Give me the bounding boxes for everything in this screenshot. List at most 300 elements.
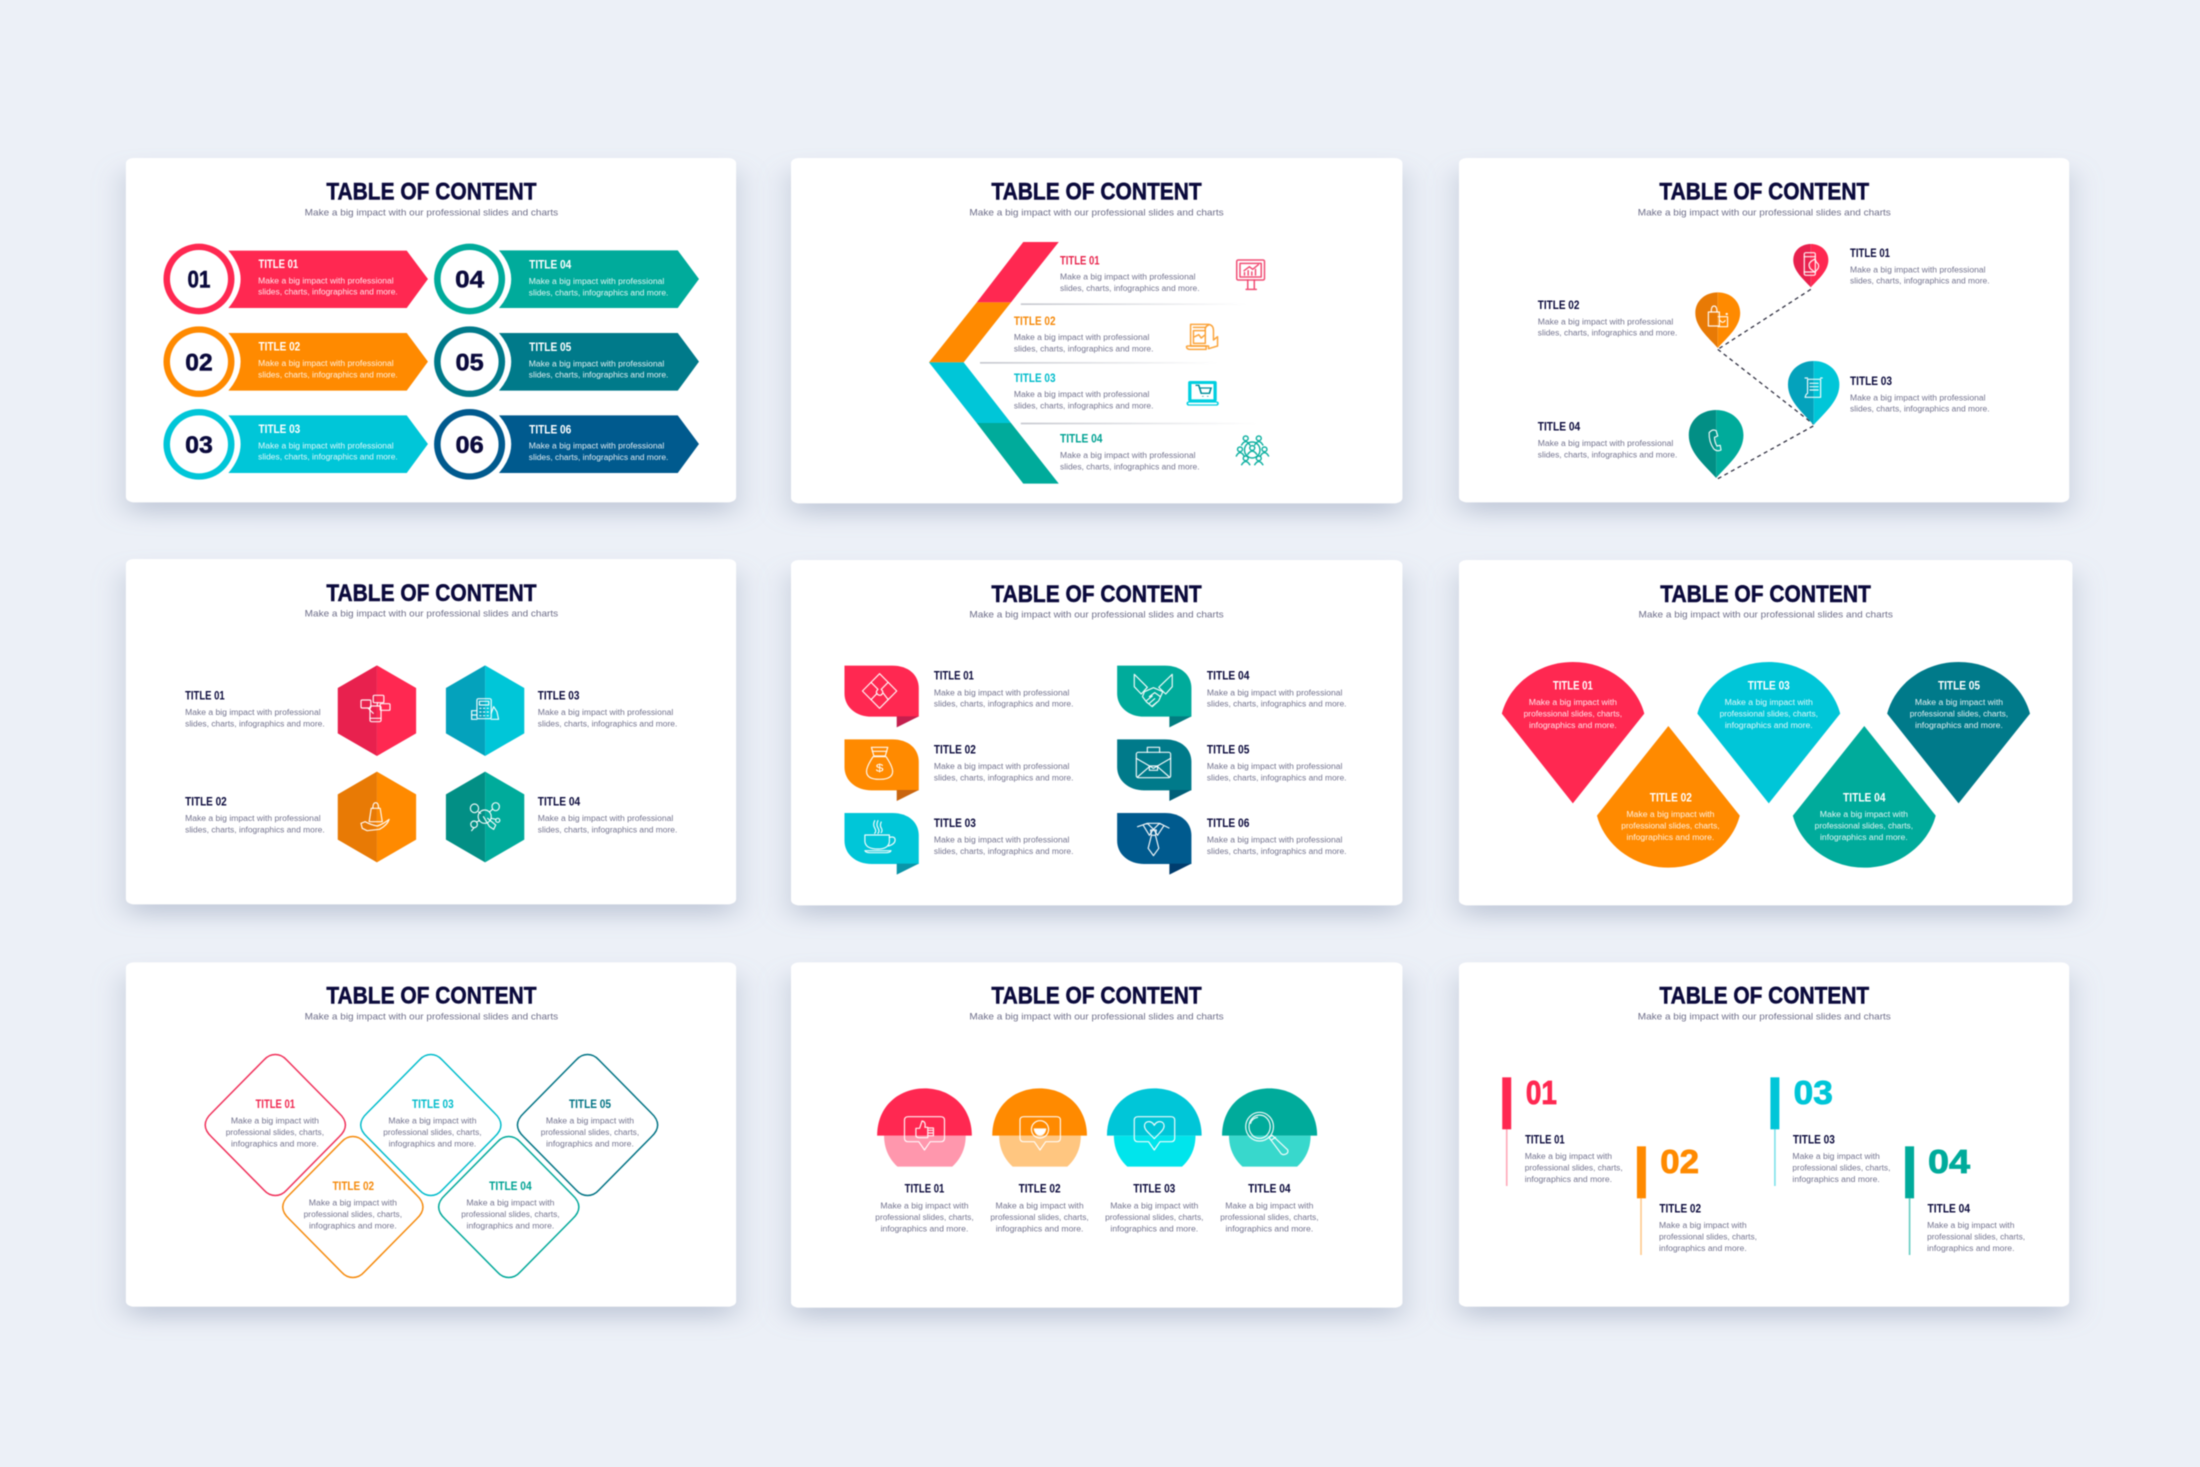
description 04	[538, 814, 677, 834]
item 02	[163, 326, 428, 397]
description 01: Make a big impact with professional	[1850, 265, 1986, 274]
description 04: infographics and more.	[467, 1222, 554, 1230]
description 02: Make a big impact with professional	[185, 814, 321, 823]
description 01: Make a big impact with	[231, 1117, 319, 1125]
description 01	[934, 688, 1073, 708]
item 05	[1887, 662, 2030, 803]
number ring 06	[434, 409, 505, 480]
tab 01	[844, 666, 919, 727]
description 01	[185, 708, 325, 728]
label 01: TITLE 01	[256, 1097, 295, 1111]
description 03	[1792, 1152, 1890, 1184]
label 01: TITLE 01	[185, 689, 225, 702]
item 01	[1502, 1074, 1623, 1186]
description 04: slides, charts, infographics and more.	[1538, 451, 1677, 459]
description 02	[1014, 333, 1153, 353]
description 01: slides, charts, infographics and more.	[934, 700, 1073, 708]
label 02: TITLE 02	[1019, 1182, 1061, 1195]
description 01	[1524, 698, 1622, 730]
label 04: TITLE 04	[1538, 420, 1581, 433]
description 05: Make a big impact with	[1915, 698, 2003, 707]
label 02: TITLE 02	[185, 795, 227, 808]
icon: phone with chat bubbles	[361, 695, 390, 722]
diamond 02	[283, 1136, 423, 1277]
arrow 01	[228, 251, 428, 308]
description 02: infographics and more.	[1627, 833, 1714, 842]
subheading: Make a big impact with our professional slides and charts	[305, 609, 558, 619]
description 04: Make a big impact with professional	[1060, 451, 1196, 460]
chevron	[929, 242, 1059, 484]
label 04: TITLE 04	[489, 1179, 532, 1193]
item 04	[1117, 666, 1347, 727]
icon: telephone receiver	[1709, 430, 1721, 451]
item 01	[1793, 244, 1990, 287]
description 04: infographics and more.	[1927, 1244, 2014, 1253]
description 03: Make a big impact with	[1792, 1152, 1880, 1161]
description 02	[990, 1202, 1089, 1233]
description 01: Make a big impact with professional	[258, 276, 394, 285]
card	[126, 559, 736, 904]
description 01	[258, 276, 398, 296]
label 02: TITLE 02	[934, 743, 976, 756]
description 03: slides, charts, infographics and more.	[1014, 401, 1153, 410]
tab 06	[1117, 813, 1191, 875]
item 04	[1060, 432, 1269, 471]
description 03: professional slides, charts,	[1720, 710, 1818, 718]
label 04: TITLE 04	[1843, 791, 1886, 804]
item 06	[434, 409, 699, 480]
description 04	[461, 1199, 560, 1230]
description 06	[529, 442, 668, 462]
description 03: professional slides, charts,	[1792, 1163, 1890, 1172]
description 01: Make a big impact with professional	[185, 708, 321, 717]
item 03	[1788, 361, 1990, 425]
description 02: slides, charts, infographics and more.	[258, 370, 398, 379]
label 04: TITLE 04	[1060, 432, 1103, 445]
label 01: TITLE 01	[934, 669, 974, 682]
label 03: TITLE 03	[934, 816, 976, 830]
description 04: infographics and more.	[1226, 1225, 1313, 1233]
hexagon 04	[446, 772, 524, 862]
item 04	[446, 772, 677, 862]
diamond 04	[439, 1136, 579, 1277]
description 01	[226, 1117, 324, 1148]
description 02: slides, charts, infographics and more.	[1538, 329, 1677, 337]
number 04: 04	[1928, 1143, 1970, 1180]
arrow 03	[228, 415, 428, 473]
pin 04	[1689, 410, 1743, 478]
description 03: Make a big impact with	[388, 1117, 477, 1125]
number 05: 05	[456, 349, 484, 376]
description 05	[541, 1117, 639, 1148]
item 03	[163, 409, 428, 480]
subheading: Make a big impact with our professional slides and charts	[969, 1012, 1224, 1022]
description 04: slides, charts, infographics and more.	[529, 288, 668, 297]
description 04: slides, charts, infographics and more.	[1060, 462, 1200, 471]
icon: phone and hand	[1804, 253, 1819, 275]
description 01: Make a big impact with	[880, 1202, 969, 1210]
description 03: infographics and more.	[389, 1140, 476, 1148]
description 01: Make a big impact with professional	[1060, 273, 1196, 281]
arrow 05	[499, 333, 699, 391]
description 03: slides, charts, infographics and more.	[258, 453, 398, 461]
item 03	[446, 665, 677, 756]
description 03: slides, charts, infographics and more.	[1850, 405, 1990, 413]
arrow 02	[228, 333, 428, 391]
item 05	[517, 1054, 658, 1195]
card	[126, 158, 736, 502]
description 03: slides, charts, infographics and more.	[538, 719, 677, 728]
description 04	[1538, 439, 1677, 459]
diamond 01	[205, 1054, 345, 1195]
label 01: TITLE 01	[1525, 1133, 1565, 1146]
item 04	[434, 244, 699, 314]
drop 01	[1502, 662, 1644, 803]
heading: TABLE OF CONTENT	[991, 178, 1202, 205]
description 01: slides, charts, infographics and more.	[1850, 277, 1990, 285]
item 03	[1697, 662, 1840, 803]
item 01	[875, 1088, 974, 1233]
panel: chevron list	[791, 158, 1402, 503]
description 02: slides, charts, infographics and more.	[185, 825, 325, 834]
dome 01	[877, 1088, 972, 1167]
description 05	[529, 359, 668, 379]
description 01: Make a big impact with	[1525, 1152, 1612, 1161]
description 01: infographics and more.	[1525, 1175, 1612, 1184]
item 05	[434, 326, 699, 397]
icon: shirt collar and tie	[1138, 823, 1169, 856]
description 02	[934, 762, 1073, 782]
label 02: TITLE 02	[332, 1179, 374, 1193]
description 02: infographics and more.	[309, 1222, 397, 1230]
item 02	[1538, 292, 1740, 348]
description 05: Make a big impact with	[546, 1117, 634, 1125]
label 02: TITLE 02	[1014, 314, 1056, 328]
item 02	[1014, 314, 1218, 353]
card	[1459, 962, 2069, 1307]
item 02	[844, 739, 1073, 801]
bar 03	[1770, 1077, 1779, 1186]
arrow 04	[499, 250, 699, 308]
label 01: TITLE 01	[1850, 246, 1890, 260]
description 03: professional slides, charts,	[383, 1128, 482, 1137]
description 03: Make a big impact with	[1110, 1202, 1198, 1210]
description 04: infographics and more.	[1820, 833, 1908, 842]
card	[1459, 560, 2072, 905]
heading: TABLE OF CONTENT	[991, 982, 1202, 1009]
description 01	[875, 1202, 974, 1233]
label 03: TITLE 03	[1133, 1182, 1175, 1195]
label 04: TITLE 04	[538, 795, 581, 808]
icon: smiley in bubble	[1020, 1117, 1060, 1150]
bar 04	[1905, 1146, 1914, 1255]
description 01	[1060, 273, 1200, 293]
panel: domes	[791, 962, 1402, 1308]
item 03	[844, 813, 1073, 875]
label 03: TITLE 03	[1014, 371, 1056, 385]
item 05	[1117, 739, 1347, 801]
label 01: TITLE 01	[1060, 254, 1100, 267]
description 03: Make a big impact with professional	[934, 836, 1069, 844]
label 02: TITLE 02	[1650, 791, 1692, 804]
subheading: Make a big impact with our professional slides and charts	[305, 1012, 558, 1022]
description 01: Make a big impact with	[1529, 698, 1617, 707]
heading: TABLE OF CONTENT	[326, 178, 537, 205]
icon: heart in bubble	[1134, 1117, 1175, 1150]
label 02: TITLE 02	[1659, 1202, 1701, 1215]
description 03	[934, 836, 1073, 856]
label 04: TITLE 04	[529, 258, 572, 271]
description 03	[1850, 393, 1990, 413]
description 02: Make a big impact with professional	[1538, 317, 1673, 326]
heading: TABLE OF CONTENT	[326, 580, 537, 606]
description 05: professional slides, charts,	[541, 1128, 639, 1137]
label 02: TITLE 02	[259, 340, 300, 353]
item 04	[439, 1136, 579, 1277]
description 02: professional slides, charts,	[1659, 1232, 1757, 1241]
icon: money bag	[867, 747, 893, 779]
icon: shopping bags	[1708, 306, 1728, 327]
description 03: Make a big impact with professional	[1014, 390, 1149, 399]
subheading: Make a big impact with our professional slides and charts	[1639, 610, 1893, 620]
description 04: professional slides, charts,	[1815, 821, 1913, 830]
tab 03	[844, 813, 919, 875]
description 04: professional slides, charts,	[1927, 1232, 2025, 1241]
label 05: TITLE 05	[1938, 679, 1980, 692]
card	[791, 158, 1402, 503]
description 05: professional slides, charts,	[1910, 710, 2008, 718]
description 05: slides, charts, infographics and more.	[1207, 773, 1347, 782]
label 01: TITLE 01	[1553, 679, 1593, 692]
diamond 03	[361, 1054, 501, 1195]
tab 04	[1117, 666, 1191, 727]
description 03	[258, 441, 398, 461]
description 04: Make a big impact with	[466, 1199, 554, 1207]
description 04	[1815, 810, 1913, 842]
description 03: Make a big impact with professional	[1850, 393, 1986, 402]
pin 02	[1695, 292, 1740, 348]
number 03: 03	[1794, 1074, 1833, 1111]
icon: briefcase	[1136, 747, 1171, 778]
description 04: Make a big impact with	[1927, 1221, 2014, 1230]
heading: TABLE OF CONTENT	[1660, 581, 1871, 607]
label 02: TITLE 02	[1538, 298, 1579, 312]
description 04: professional slides, charts,	[1220, 1213, 1319, 1222]
description 02	[1659, 1221, 1757, 1253]
label 01: TITLE 01	[259, 257, 298, 271]
heading: TABLE OF CONTENT	[326, 982, 537, 1009]
number ring 04	[434, 244, 505, 314]
description 03: slides, charts, infographics and more.	[934, 847, 1073, 856]
item 01	[844, 666, 1073, 727]
label 05: TITLE 05	[529, 340, 571, 354]
label 01: TITLE 01	[905, 1182, 944, 1195]
description 06: slides, charts, infographics and more.	[529, 453, 668, 462]
hexagon 01	[338, 665, 416, 756]
label 04: TITLE 04	[1248, 1182, 1291, 1195]
panel: hexagons	[126, 559, 736, 904]
label 04: TITLE 04	[1928, 1202, 1971, 1215]
description 01: professional slides, charts,	[1524, 710, 1622, 718]
description 04	[529, 277, 668, 297]
number 06: 06	[456, 432, 484, 458]
description 02	[1538, 317, 1677, 337]
description 04	[1220, 1202, 1319, 1233]
description 03: infographics and more.	[1792, 1175, 1880, 1184]
description 04: slides, charts, infographics and more.	[538, 825, 677, 834]
description 04: Make a big impact with professional	[529, 277, 664, 286]
item 04	[1538, 410, 1743, 478]
description 02: Make a big impact with	[309, 1199, 397, 1207]
item 01	[185, 665, 416, 756]
description 04: Make a big impact with professional	[1538, 439, 1673, 448]
description 04	[1927, 1221, 2025, 1253]
icon: document and envelope	[1187, 324, 1218, 349]
hexagon 02	[338, 772, 416, 862]
description 05	[1207, 762, 1347, 782]
card	[1459, 158, 2069, 502]
subheading: Make a big impact with our professional slides and charts	[305, 208, 558, 218]
card	[126, 962, 736, 1307]
description 02: professional slides, charts,	[304, 1210, 402, 1219]
drop 05	[1887, 662, 2030, 803]
panel: big numbers with bars	[1459, 962, 2069, 1307]
number ring 01	[163, 244, 234, 314]
tab 02	[844, 739, 919, 801]
pin 03	[1788, 361, 1839, 425]
bar 01	[1502, 1077, 1511, 1186]
label 06: TITLE 06	[1207, 816, 1249, 830]
description 02: professional slides, charts,	[1621, 821, 1720, 830]
description 03	[538, 708, 677, 728]
description 03: infographics and more.	[1725, 721, 1813, 730]
description 02: Make a big impact with	[1659, 1221, 1747, 1230]
description 04: Make a big impact with	[1820, 810, 1908, 819]
description 03	[1720, 698, 1818, 730]
dome 04	[1222, 1088, 1317, 1167]
description 06: Make a big impact with professional	[1207, 836, 1342, 844]
subheading: Make a big impact with our professional slides and charts	[969, 610, 1224, 620]
label 06: TITLE 06	[529, 423, 571, 436]
number 02: 02	[185, 349, 213, 376]
item 04	[1905, 1143, 2025, 1255]
number ring 02	[163, 326, 234, 397]
dome 02	[992, 1088, 1087, 1167]
item 03	[1014, 371, 1218, 410]
description 02: slides, charts, infographics and more.	[934, 773, 1073, 782]
label 03: TITLE 03	[1793, 1133, 1835, 1146]
heading: TABLE OF CONTENT	[1659, 982, 1870, 1009]
icon: laptop with cart	[1187, 381, 1218, 405]
description 06: slides, charts, infographics and more.	[1207, 847, 1347, 856]
icon: handshake	[1134, 674, 1172, 707]
description 04	[1060, 451, 1200, 471]
icon: calculator with books	[472, 699, 499, 719]
description 02	[304, 1199, 402, 1230]
item 01	[1502, 662, 1644, 803]
item 02	[1637, 1143, 1757, 1255]
icon: thumbs up in bubble	[904, 1117, 944, 1150]
bar 02	[1637, 1146, 1646, 1255]
arrow 06	[499, 415, 699, 473]
diamond 05	[517, 1054, 658, 1195]
heading: TABLE OF CONTENT	[1659, 178, 1870, 205]
icon: team network	[1236, 436, 1269, 465]
item 01	[1060, 254, 1264, 293]
description 02: infographics and more.	[1659, 1244, 1747, 1253]
description 04	[1207, 688, 1347, 708]
label 03: TITLE 03	[259, 422, 300, 436]
number 01: 01	[188, 266, 210, 293]
description 04: professional slides, charts,	[461, 1210, 560, 1219]
dashed route	[1717, 289, 1813, 479]
number 02: 02	[1660, 1143, 1699, 1180]
description 01: infographics and more.	[1529, 721, 1617, 730]
label 05: TITLE 05	[1207, 743, 1249, 756]
panel: six numbered arrows	[126, 158, 736, 502]
drop 04	[1793, 726, 1936, 868]
description 03: Make a big impact with	[1725, 698, 1813, 707]
description 01: professional slides, charts,	[875, 1213, 974, 1222]
description 05: Make a big impact with professional	[529, 359, 664, 368]
subheading: Make a big impact with our professional slides and charts	[1638, 1012, 1891, 1022]
description 02: professional slides, charts,	[990, 1213, 1089, 1222]
description 01: Make a big impact with professional	[934, 688, 1069, 697]
icon: click network	[470, 803, 500, 831]
description 02: Make a big impact with	[996, 1202, 1084, 1210]
description 02: slides, charts, infographics and more.	[1014, 345, 1153, 353]
description 01: slides, charts, infographics and more.	[185, 719, 325, 728]
panel: teardrops	[1459, 560, 2072, 905]
item 01	[163, 244, 428, 314]
item 01	[205, 1054, 345, 1195]
label 03: TITLE 03	[538, 689, 579, 702]
description 05	[1910, 698, 2008, 730]
number 03: 03	[185, 432, 213, 458]
description 01: slides, charts, infographics and more.	[258, 288, 398, 296]
description 04: slides, charts, infographics and more.	[1207, 700, 1347, 708]
subheading: Make a big impact with our professional slides and charts	[969, 208, 1224, 218]
description 01: infographics and more.	[231, 1140, 319, 1148]
pin 01	[1793, 244, 1828, 287]
description 01: professional slides, charts,	[226, 1128, 324, 1137]
icon: hand holding bag	[361, 803, 389, 831]
item 02	[990, 1088, 1089, 1233]
hexagon 03	[446, 665, 524, 756]
heading: TABLE OF CONTENT	[991, 581, 1202, 607]
description 05: infographics and more.	[546, 1140, 634, 1148]
card	[791, 560, 1402, 905]
description 02: infographics and more.	[996, 1225, 1083, 1233]
panel: speech tabs	[791, 560, 1402, 905]
panel: outlined diamonds	[126, 962, 736, 1307]
description 02	[185, 814, 325, 834]
description 04: Make a big impact with professional	[1207, 688, 1342, 697]
item 02	[283, 1136, 423, 1277]
item 04	[1793, 726, 1936, 868]
description 01	[1850, 265, 1990, 285]
item 02	[1597, 726, 1740, 868]
description 05: infographics and more.	[1915, 721, 2003, 730]
number 01: 01	[1526, 1074, 1557, 1111]
label 03: TITLE 03	[1850, 374, 1892, 388]
panel: map pin path	[1459, 158, 2069, 502]
label 03: TITLE 03	[1748, 679, 1790, 692]
description 01: slides, charts, infographics and more.	[1060, 284, 1200, 293]
label 05: TITLE 05	[569, 1097, 611, 1111]
description 05: slides, charts, infographics and more.	[529, 371, 668, 379]
description 03: professional slides, charts,	[1105, 1213, 1203, 1222]
